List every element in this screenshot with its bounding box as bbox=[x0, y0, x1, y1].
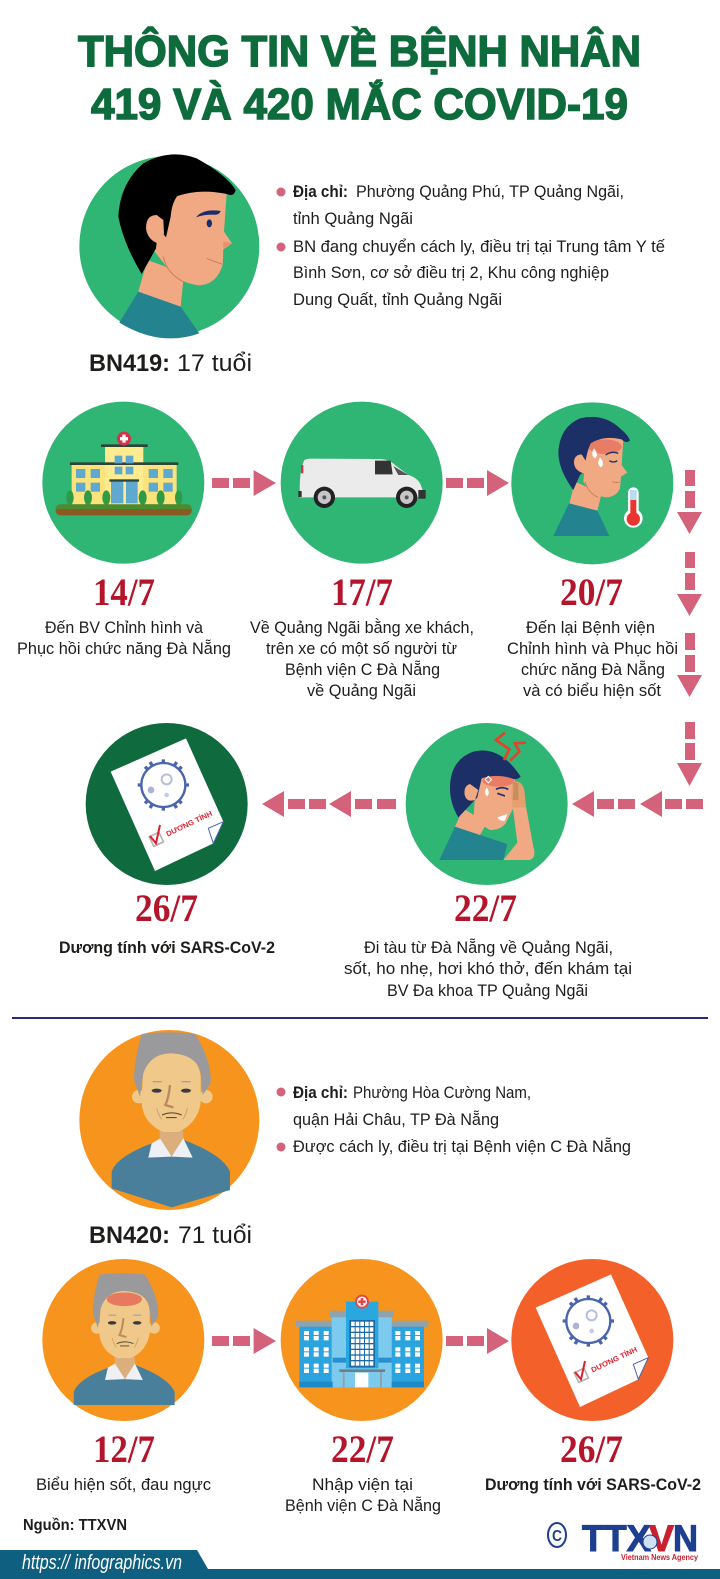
description 14/7: Đến BV Chỉnh hình và bbox=[45, 618, 204, 637]
description 14/7 bbox=[17, 618, 231, 658]
date 17/7: 17/7 bbox=[331, 571, 393, 614]
title: 419 VÀ 420 MẮC COVID-19 bbox=[91, 79, 628, 129]
date 26/7: 26/7 bbox=[560, 1428, 623, 1471]
title bbox=[78, 25, 641, 129]
logo: TTXVN: C bbox=[552, 1528, 562, 1545]
description 17/7: Bệnh viện C Đà Nẵng bbox=[285, 660, 440, 679]
icon: white van bbox=[281, 402, 443, 564]
arrow: 14/7 to 17/7 bbox=[212, 470, 276, 496]
patient 419 label bbox=[89, 350, 252, 377]
description 17/7: trên xe có một số người từ bbox=[266, 639, 457, 658]
icon: young man portrait bbox=[79, 154, 259, 338]
date 14/7: 14/7 bbox=[93, 571, 155, 614]
description 17/7: Về Quảng Ngãi bằng xe khách, bbox=[250, 618, 474, 637]
description 22/7: Đi tàu từ Đà Nẵng về Quảng Ngãi, bbox=[364, 938, 613, 957]
section divider bbox=[12, 1017, 708, 1019]
logo: TTXVN: Vietnam News Agency bbox=[621, 1553, 698, 1562]
description 17/7: về Quảng Ngãi bbox=[307, 681, 416, 700]
panel: 20/7 step bbox=[507, 402, 678, 700]
description 26/7: Dương tính với SARS-CoV-2 bbox=[485, 1475, 701, 1494]
description 26/7: Dương tính với SARS-CoV-2 bbox=[59, 938, 275, 957]
panel: 14/7 step bbox=[17, 402, 231, 658]
date 20/7: 20/7 bbox=[560, 571, 623, 614]
description 20/7: và có biểu hiện sốt bbox=[523, 681, 661, 700]
panel: 22/7 step bbox=[344, 723, 632, 1000]
date 22/7: 22/7 bbox=[454, 887, 517, 930]
footer band with URL bbox=[0, 1550, 720, 1579]
patient 420 details bbox=[276, 1083, 631, 1156]
patient 419 details: Bình Sơn, cơ sở điều trị 2, Khu công nghiệp bbox=[293, 263, 609, 282]
logo: TTXVN: TTX bbox=[582, 1518, 651, 1559]
icon: positive test document on orange-red: DƯƠNG TÍNH bbox=[590, 1345, 639, 1374]
icon: blue hospital bbox=[281, 1259, 443, 1421]
patient 420 label: 71 tuổi bbox=[178, 1222, 252, 1249]
description 20/7 bbox=[507, 618, 678, 700]
description 12/7: Biểu hiện sốt, đau ngực bbox=[36, 1475, 211, 1494]
patient 419 details: tỉnh Quảng Ngãi bbox=[293, 209, 413, 228]
patient 419 details: Phường Quảng Phú, TP Quảng Ngãi, bbox=[356, 182, 624, 201]
patient 420 details: Được cách ly, điều trị tại Bệnh viện C Đà Nẵng bbox=[293, 1137, 631, 1156]
patient 420 label bbox=[89, 1222, 252, 1249]
description 17/7 bbox=[250, 618, 474, 700]
icon: yellow hospital bbox=[42, 402, 204, 564]
panel: 26/7 positive step, patient 419 bbox=[59, 723, 275, 957]
icon: elderly man with fever bbox=[42, 1259, 204, 1422]
source credit: Nguồn: TTXVN bbox=[23, 1517, 127, 1534]
icon: man with headache bbox=[406, 723, 568, 885]
icon: feverish man with thermometer bbox=[511, 402, 673, 564]
patient 419 details: Dung Quất, tỉnh Quảng Ngãi bbox=[293, 290, 502, 309]
patient 419 details: BN đang chuyển cách ly, điều trị tại Trung tâm Y tế bbox=[293, 237, 666, 256]
description 22/7: BV Đa khoa TP Quảng Ngãi bbox=[387, 981, 588, 1000]
patient 420 details: Địa chỉ: bbox=[293, 1083, 348, 1102]
description 22/7: Nhập viện tại bbox=[312, 1475, 413, 1494]
patient 420 label: BN420: bbox=[89, 1222, 170, 1249]
icon: positive test document on dark green bbox=[86, 723, 248, 885]
panel: 12/7 step bbox=[36, 1259, 211, 1494]
date 26/7: 26/7 bbox=[135, 887, 198, 930]
icon: positive test document on orange-red bbox=[511, 1259, 673, 1421]
logo: TTXVN: V bbox=[649, 1518, 674, 1559]
panel: 22/7 step, patient 420 bbox=[281, 1259, 443, 1515]
description 20/7: chức năng Đà Nẵng bbox=[521, 660, 665, 679]
panel: 17/7 step bbox=[250, 402, 474, 700]
date 12/7: 12/7 bbox=[93, 1428, 155, 1471]
arrow: 20/7 down to 22/7 bbox=[572, 470, 703, 817]
patient 420 details: quận Hải Châu, TP Đà Nẵng bbox=[293, 1110, 499, 1129]
arrow: 17/7 to 20/7 bbox=[446, 470, 509, 496]
title: THÔNG TIN VỀ BỆNH NHÂN bbox=[78, 25, 641, 76]
description 22/7 bbox=[285, 1475, 441, 1515]
patient 419 details: Địa chỉ: bbox=[293, 182, 348, 201]
patient 420 details: Phường Hòa Cường Nam, bbox=[353, 1083, 531, 1102]
description 22/7: Bệnh viện C Đà Nẵng bbox=[285, 1496, 441, 1515]
logo: TTXVN: N bbox=[673, 1518, 698, 1559]
patient 419 details bbox=[276, 182, 666, 309]
arrow: 22/7 to 26/7 bbox=[262, 791, 396, 817]
icon: positive test document on dark green: DƯƠNG TÍNH bbox=[165, 809, 214, 838]
footer band with URL: https:// infographics.vn bbox=[22, 1552, 182, 1574]
panel: patient 420 profile bbox=[79, 1030, 631, 1249]
patient 419 label: BN419: bbox=[89, 350, 170, 377]
arrow: 12/7 to 22/7 bbox=[212, 1328, 276, 1354]
description 20/7: Chỉnh hình và Phục hồi bbox=[507, 639, 678, 658]
patient 419 label: 17 tuổi bbox=[177, 350, 252, 377]
logo: TTXVN bbox=[548, 1518, 698, 1562]
panel: patient 419 profile bbox=[79, 154, 666, 377]
description 14/7: Phục hồi chức năng Đà Nẵng bbox=[17, 639, 231, 658]
panel: 26/7 positive step, patient 420 bbox=[485, 1259, 701, 1494]
description 20/7: Đến lại Bệnh viện bbox=[526, 618, 655, 637]
icon: elderly man portrait bbox=[79, 1030, 259, 1210]
arrow: 22/7 to 26/7 bbox=[446, 1328, 509, 1354]
date 22/7: 22/7 bbox=[331, 1428, 394, 1471]
description 22/7 bbox=[344, 938, 632, 1000]
description 22/7: sốt, ho nhẹ, hơi khó thở, đến khám tại bbox=[344, 959, 632, 978]
